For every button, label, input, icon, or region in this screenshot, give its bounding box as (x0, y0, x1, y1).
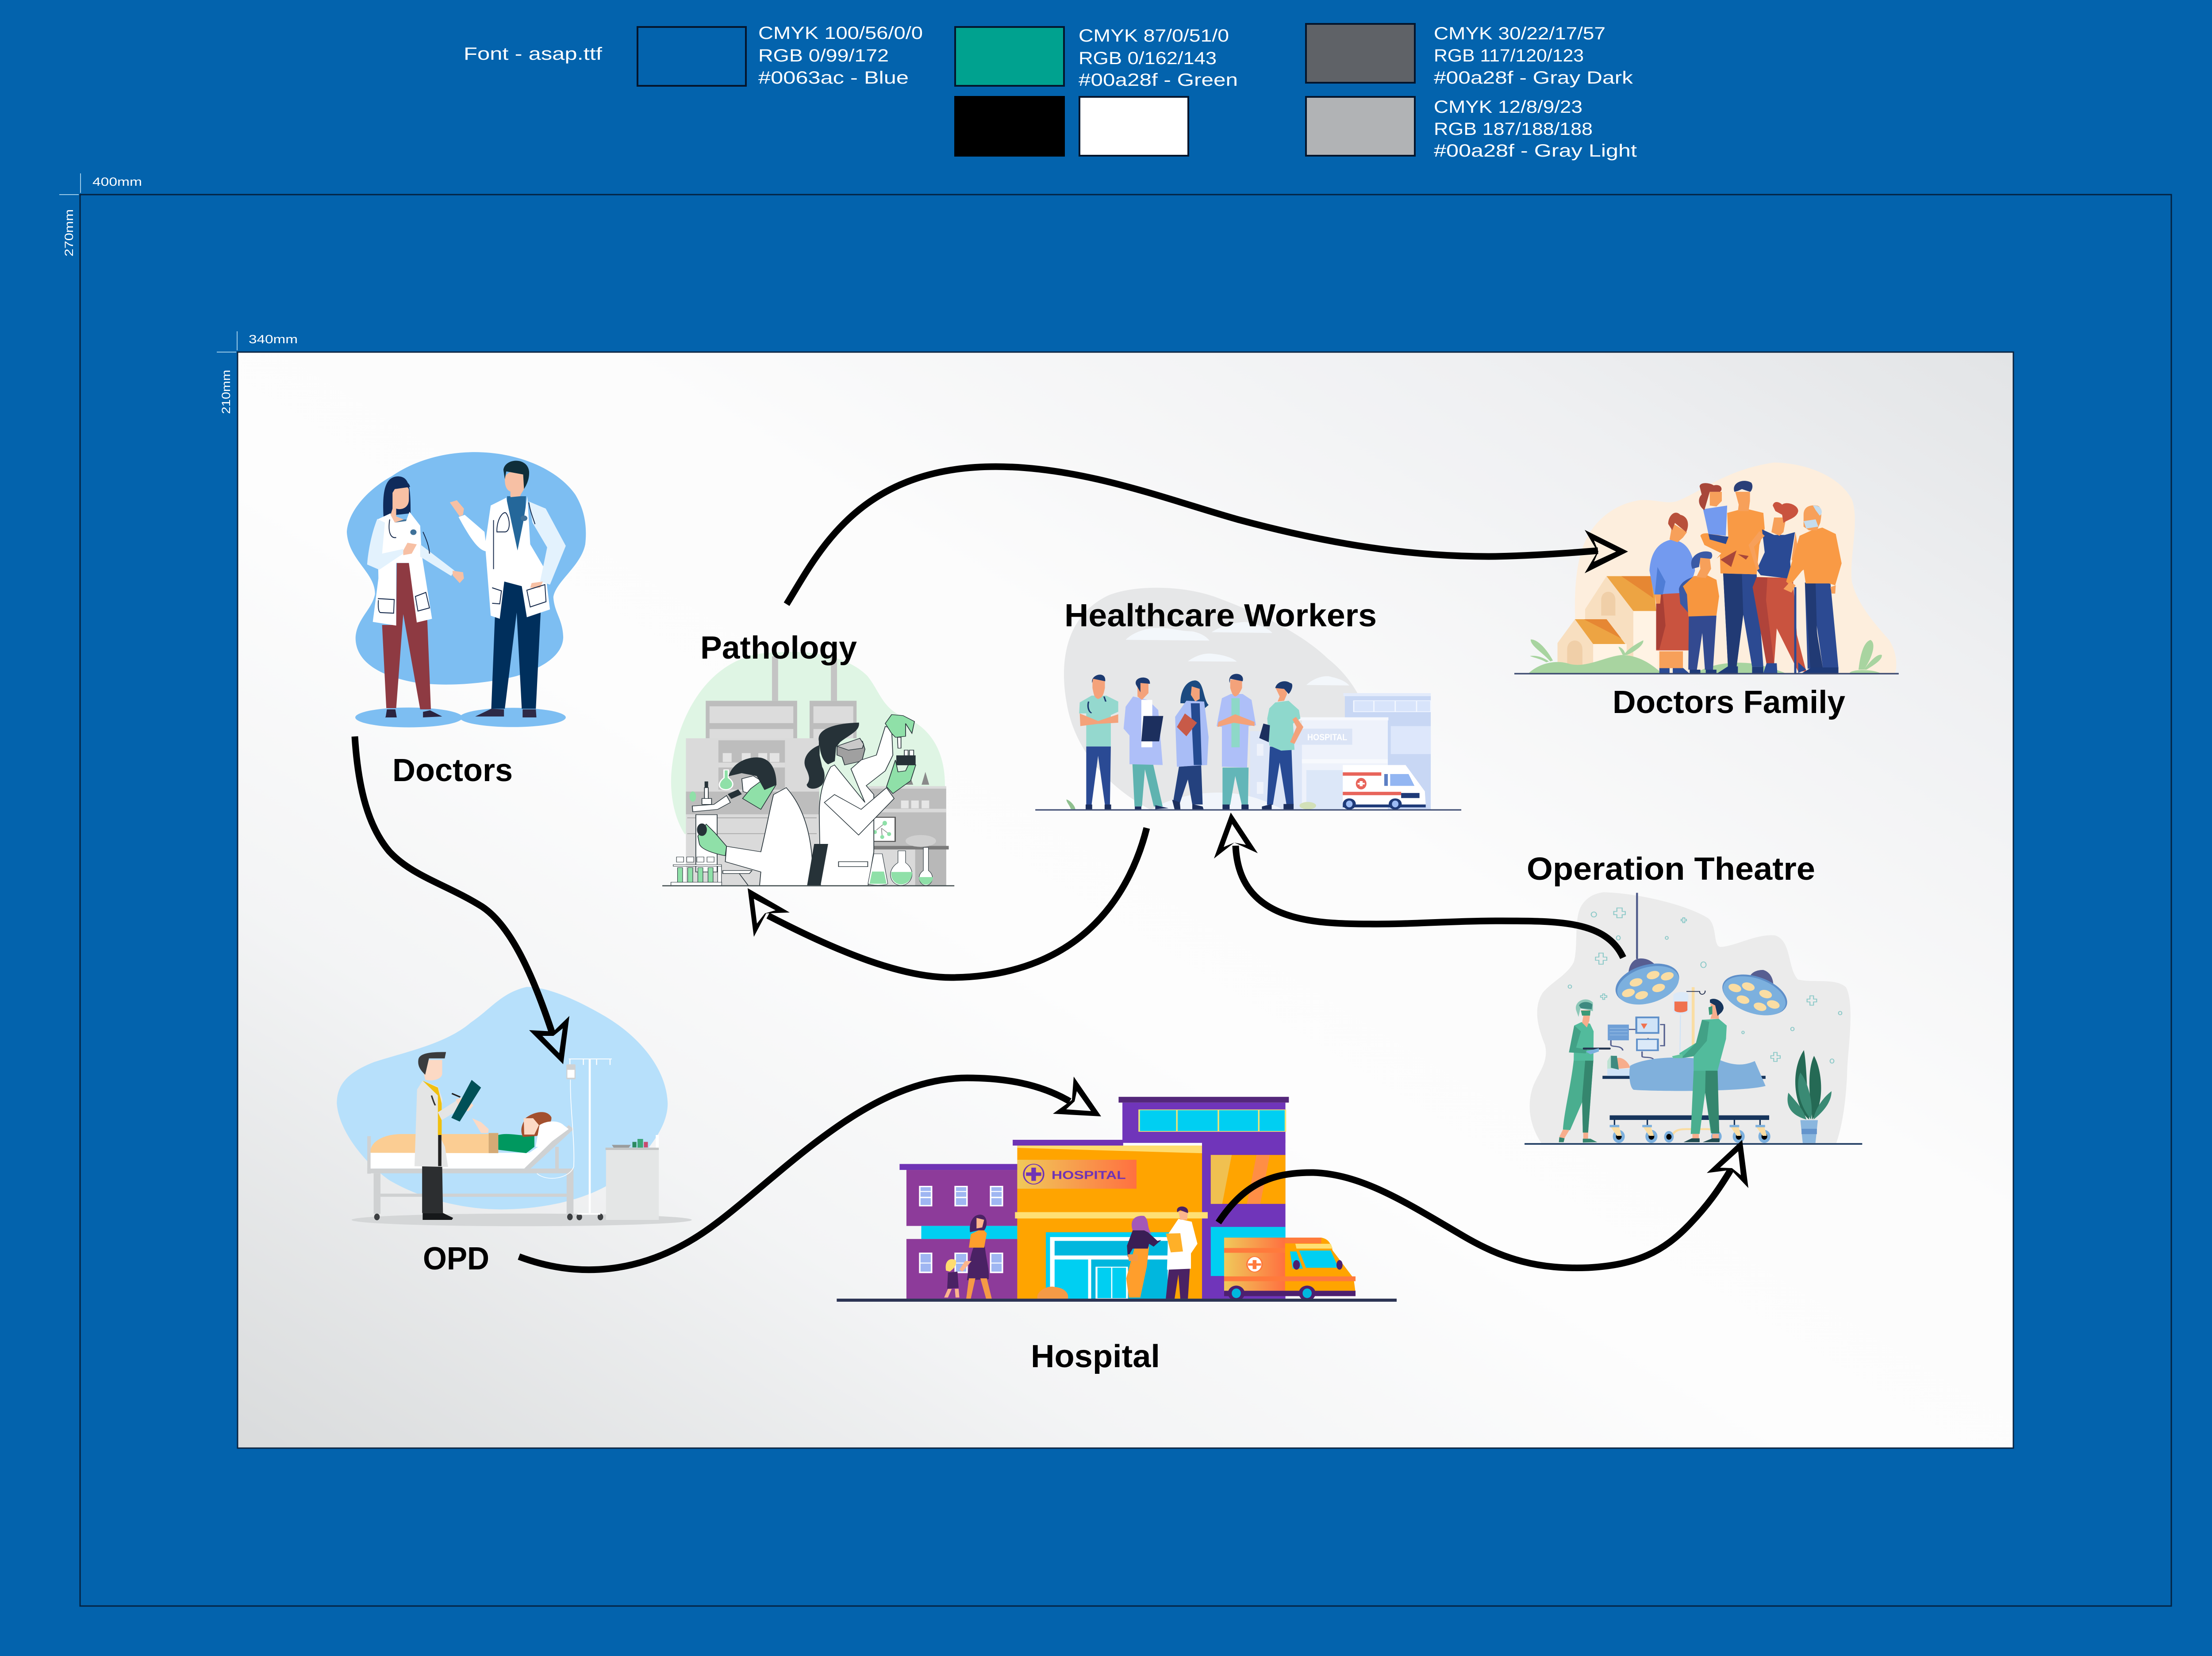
blob: OPD background (337, 987, 668, 1209)
outer dimension: 270mm: 270mm (62, 209, 76, 257)
test tube rack (671, 857, 722, 886)
grass and plants (1529, 640, 1882, 673)
swatch: green (955, 26, 1238, 90)
figure: mother (1649, 513, 1695, 673)
outer dimension: 400mm: 400mm (92, 175, 142, 188)
swatch: gray dark: #00a28f - Gray Dark (1434, 68, 1633, 88)
chair (807, 844, 828, 886)
arrow: OPD to hospital (519, 1077, 1101, 1270)
nurse (1559, 1000, 1611, 1142)
microscope (692, 782, 752, 886)
swatch: green: RGB 0/162/143 (1079, 49, 1217, 68)
inner dimension: 210mm (217, 352, 236, 414)
swatch: gray dark (1306, 24, 1633, 88)
ground line (662, 885, 954, 886)
illustration: hospital (837, 1097, 1397, 1302)
scientist: man (697, 758, 813, 886)
ambulance (1224, 1238, 1356, 1301)
arrow: hospital to operation theatre (1218, 1140, 1748, 1268)
hospital centre block (1013, 1140, 1208, 1299)
floor shadows (355, 708, 566, 727)
font note: Font - asap.ttf (464, 44, 603, 64)
plant (1066, 799, 1075, 809)
worker 1 (1079, 675, 1118, 809)
people: patient and doctor (1126, 1207, 1198, 1299)
swatch: blue (637, 23, 923, 88)
inner dimension: 340mm: 340mm (249, 333, 298, 346)
swatch: gray dark: CMYK 30/22/17/57 (1434, 24, 1605, 43)
swatch: blue: CMYK 100/56/0/0 (758, 23, 923, 43)
monitors (1608, 1016, 1664, 1059)
flask on shelf (719, 770, 733, 790)
swatch: blue: #0063ac - Blue (758, 68, 909, 88)
hospital building: HOSPITAL (1307, 732, 1347, 742)
doctor (415, 1052, 481, 1220)
figure: woman doctor (367, 476, 464, 717)
ground line (1035, 809, 1461, 811)
blob: family background (1575, 463, 1896, 674)
swatch: black (954, 96, 1065, 157)
hill (1151, 793, 1284, 810)
label: Doctors Family: Doctors Family (1613, 685, 1845, 720)
inner dimension: 210mm: 210mm (219, 370, 233, 414)
hospital left wing (899, 1164, 1018, 1299)
scientist: woman (805, 715, 916, 886)
floor shadow (352, 1214, 692, 1226)
swatch: gray light: RGB 187/188/188 (1434, 119, 1593, 139)
ground line (1514, 673, 1899, 675)
surgeon (1672, 999, 1727, 1142)
label: Doctors: Doctors (392, 753, 513, 788)
swatch: green: #00a28f - Green (1079, 70, 1238, 90)
blob: pathology background (671, 652, 945, 834)
label: Hospital: Hospital (1031, 1339, 1160, 1374)
outer dimension: 400mm (81, 173, 142, 193)
swatch: gray dark: RGB 117/120/123 (1434, 46, 1584, 65)
worker 3 (1172, 680, 1209, 809)
swatch: green: CMYK 87/0/51/0 (1079, 26, 1229, 46)
clouds (1125, 622, 1349, 686)
houses (1558, 576, 1658, 674)
blob: workers background (1064, 588, 1371, 810)
panel: artboard (238, 352, 2013, 1448)
illustration: doctors (347, 452, 586, 727)
outer dimension: 270mm (59, 195, 79, 257)
label: Operation Theatre: Operation Theatre (1527, 851, 1815, 887)
patient and bed (1602, 1055, 1770, 1143)
hospital building (1250, 693, 1431, 810)
arrow: operation theatre to healthcare workers (1214, 813, 1623, 958)
worker 2 (1124, 678, 1168, 809)
patient (370, 1112, 568, 1153)
ground line (1525, 1143, 1862, 1145)
lab furniture (686, 652, 949, 886)
surgical lamp right (1714, 966, 1796, 1024)
inner dimension: 340mm (237, 331, 298, 350)
illustration: doctors family (1514, 463, 1899, 675)
hospital tower (1118, 1097, 1289, 1299)
swatch: gray light: CMYK 12/8/9/23 (1434, 97, 1582, 117)
IV stand (1673, 987, 1705, 1054)
hospital centre block: HOSPITAL (1052, 1169, 1126, 1181)
figure: man doctor (450, 461, 566, 717)
illustration: pathology (662, 652, 954, 886)
people: mother and child (944, 1215, 992, 1299)
figure: father carrying child (1699, 481, 1765, 673)
swatch: gray light (1306, 97, 1637, 161)
swatch: white (1079, 97, 1188, 156)
swatch: blue: RGB 0/99/172 (758, 46, 889, 65)
illustration: OPD (337, 987, 692, 1226)
label: OPD: OPD (423, 1241, 489, 1276)
bedside cabinet (606, 1135, 659, 1220)
glass flasks (868, 847, 933, 886)
arrow: pathology to doctors family (787, 467, 1628, 604)
ground line (837, 1299, 1397, 1302)
figure: grandmother (1749, 502, 1806, 673)
figure: boy with backpack (1679, 552, 1719, 673)
worker 5 (1259, 681, 1303, 809)
label: Pathology: Pathology (700, 630, 857, 666)
label: Healthcare Workers: Healthcare Workers (1064, 598, 1377, 633)
bed (367, 1125, 603, 1220)
arrow: healthcare workers to pathology (748, 828, 1147, 978)
arrow: doctors to OPD (355, 736, 569, 1064)
blob: doctors background (347, 452, 586, 685)
worker 4 (1217, 674, 1256, 809)
figure: grandfather with cane (1783, 506, 1842, 673)
blob: theatre background (1530, 892, 1851, 1143)
surgical lamp left (1607, 893, 1687, 1012)
illustration: operation theatre (1525, 892, 1862, 1145)
swatch: gray light: #00a28f - Gray Light (1434, 141, 1637, 161)
illustration: healthcare workers (1035, 588, 1461, 811)
ambulance (1343, 765, 1426, 809)
potted plant (1787, 1050, 1832, 1143)
IV stand (537, 1059, 612, 1214)
medical symbols (1568, 908, 1842, 1063)
